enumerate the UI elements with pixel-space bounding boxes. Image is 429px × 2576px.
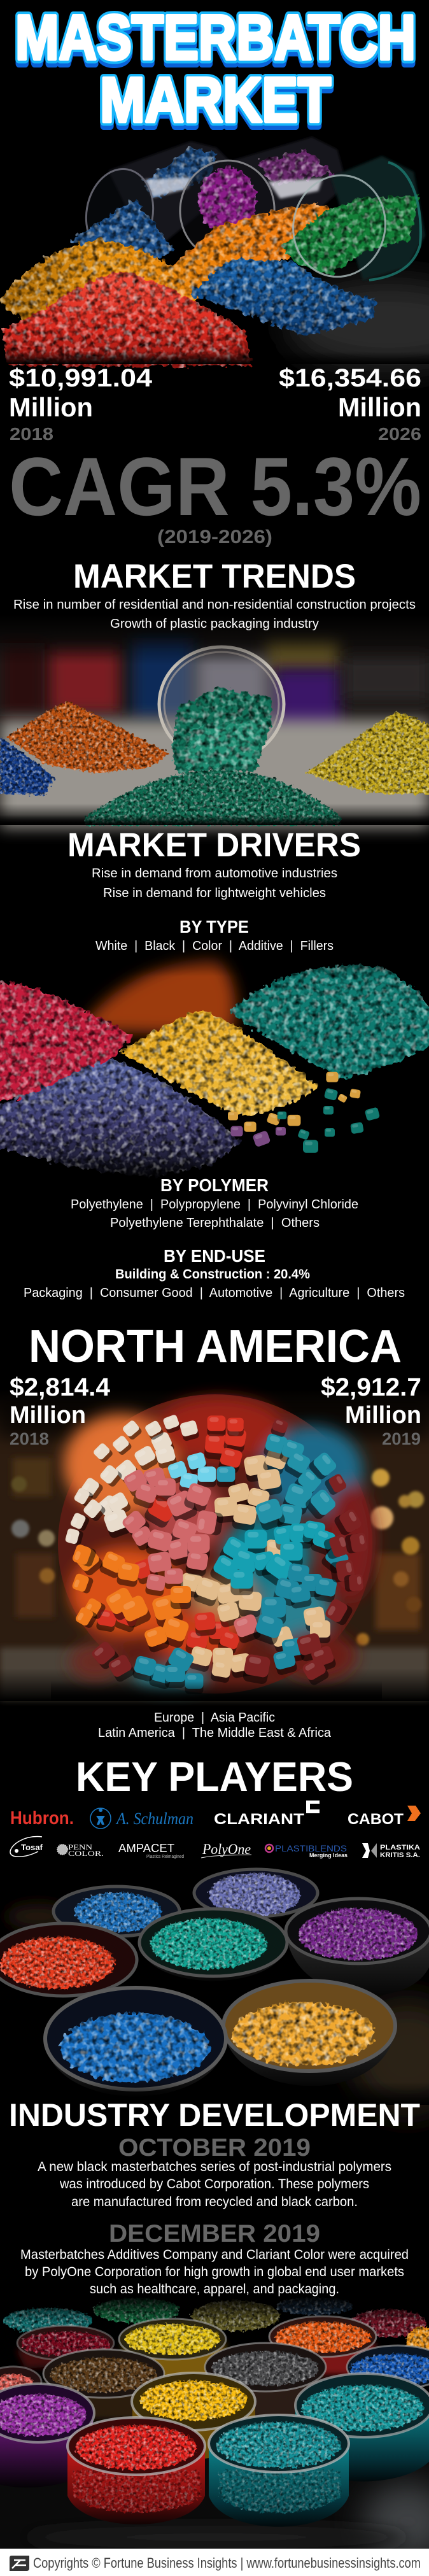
logo: Plastiblends: Merging Ideas: [309, 1852, 348, 1858]
logo: Plastiblends: PLASTIBLENDS: [275, 1843, 347, 1853]
logo: Penn Color: [57, 1843, 104, 1858]
image: sphere of colored pellets: [0, 1388, 429, 1701]
bokeh lights: [11, 1469, 424, 1646]
development: December 2019: [20, 2220, 409, 2296]
title: MARKET: [100, 64, 331, 135]
stat: 2026 market size: Million: [338, 392, 421, 422]
logo: Plastiblends: [265, 1843, 348, 1858]
bowl: periwinkle: [194, 1869, 318, 1920]
image: jars of spilled masterbatch pellets: [0, 137, 429, 369]
text: trends list: Growth of plastic packaging industry: [110, 617, 319, 631]
text: trends list: [13, 598, 416, 631]
panel: market size figures: [9, 364, 421, 548]
dish: teal front: [209, 2415, 349, 2527]
logo: Plastika Kritis: KRITIS S.A.: [380, 1851, 420, 1859]
logo: PolyOne: PolyOne: [202, 1841, 251, 1857]
panel: industry development: [0, 1869, 429, 2559]
logo: Fortune Business Insights: [10, 2556, 29, 2571]
footer bar: [0, 2549, 429, 2576]
segment: by polymer: [71, 1175, 358, 1230]
bowl: large blue: [45, 1988, 226, 2096]
stat: 2018 market size: 2018: [10, 424, 53, 444]
stat: north america 2019: 2019: [382, 1429, 421, 1448]
bowl: purple: [286, 1899, 429, 1995]
segment: by end-use: BY END-USE: [164, 1246, 265, 1266]
image: pellets spilling from jar: [0, 614, 429, 828]
logo: Ampacet: AMPACET: [118, 1842, 174, 1855]
stat: north america 2019: [321, 1373, 421, 1448]
back rows of dishes: [0, 2297, 429, 2438]
logo: Ampacet: [118, 1842, 184, 1859]
segment: by type: [95, 917, 334, 953]
logo: Tosaf: Tosaf: [21, 1843, 43, 1852]
heading: industry development: INDUSTRY DEVELOPMENT: [9, 2097, 420, 2133]
stat: north america 2018: Million: [10, 1402, 86, 1429]
development: October 2019: OCTOBER 2019: [118, 2134, 311, 2162]
text: drivers list: [92, 867, 337, 900]
logo: Clariant: [214, 1801, 320, 1828]
development: December 2019: by PolyOne Corporation for high growth in global end user markets: [25, 2265, 404, 2279]
segment: by end-use: Packaging | Consumer Good | Automotive | Agriculture | Others: [24, 1286, 405, 1300]
dish: purple: [0, 2384, 94, 2488]
stat: 2026 market size: [279, 364, 421, 444]
logo: Plastika Kritis: [362, 1843, 420, 1859]
text: trends list: Rise in number of residential and non-residential construction projects: [13, 598, 416, 612]
stat: north america 2019: Million: [345, 1402, 421, 1429]
development: October 2019: [38, 2134, 391, 2209]
title: [15, 2, 416, 139]
panel: regional analysis: [0, 1321, 429, 1740]
stat: 2018 market size: Million: [9, 392, 93, 422]
heading: key players: KEY PLAYERS: [76, 1753, 353, 1800]
stat: 2018 market size: [9, 364, 153, 444]
logo: Cabot: [348, 1806, 421, 1828]
development: December 2019: DECEMBER 2019: [109, 2220, 320, 2247]
panel: market trends: [0, 558, 429, 828]
segment: by polymer: BY POLYMER: [160, 1175, 269, 1195]
logo: Penn Color: COLOR.: [68, 1849, 104, 1858]
dish: yellow: [132, 2373, 255, 2459]
logo: Clariant: CLARIANT: [214, 1811, 304, 1828]
panel: key players: [10, 1753, 421, 1859]
logo: A. Schulman: [90, 1808, 193, 1829]
stat: north america 2019: $2,912.7: [321, 1373, 421, 1401]
logo: A. Schulman: A. Schulman: [115, 1809, 193, 1828]
title: MARKET: [100, 64, 331, 135]
development: October 2019: was introduced by Cabot Corporation. These polymers: [59, 2177, 369, 2191]
sphere color zones: [64, 1398, 376, 1690]
logo: Hubron: Hubron.: [10, 1808, 74, 1829]
dish: teal right: [295, 2374, 429, 2482]
text: other regions: Latin America | The Middle East & Africa: [98, 1726, 332, 1740]
text: drivers list: Rise in demand from automotive industries: [92, 867, 337, 881]
logo: Plastika Kritis: PLASTIKA: [380, 1844, 420, 1851]
logo: Cabot: CABOT: [348, 1811, 404, 1828]
scattered pellets: [228, 1072, 381, 1157]
text: other regions: [98, 1711, 332, 1740]
dish: red front: [67, 2417, 205, 2524]
panel: hero: [0, 2, 429, 369]
development: December 2019: such as healthcare, apparel, and packaging.: [90, 2282, 339, 2296]
title: MARKET: [100, 69, 331, 139]
development: December 2019: Masterbatches Additives Company and Clariant Color were acquired: [20, 2247, 409, 2262]
stat: north america 2018: [10, 1373, 111, 1448]
logo: Ampacet: Plastics Reimagined: [146, 1855, 184, 1859]
segment: by end-use: [24, 1246, 405, 1300]
text: other regions: Europe | Asia Pacific: [154, 1711, 275, 1725]
segment: by end-use: Building & Construction : 20.4%: [115, 1267, 310, 1282]
heading: market trends: MARKET TRENDS: [73, 558, 356, 595]
image: colored pellet piles: [0, 938, 429, 1186]
pellets on sphere: [65, 1414, 368, 1694]
segment: by polymer: Polyethylene | Polypropylene | Polyvinyl Chloride: [71, 1198, 358, 1212]
stat: north america 2018: $2,814.4: [10, 1373, 111, 1401]
panel: market drivers and segments: [0, 826, 429, 1300]
stat: north america 2018: 2018: [10, 1429, 49, 1448]
bowl: red: [0, 1923, 137, 1996]
image: bowls of pellets: [0, 1869, 429, 2114]
segment: by type: White | Black | Color | Additive | Fillers: [95, 939, 334, 953]
development: October 2019: A new black masterbatches series of post-industrial polymers: [38, 2160, 391, 2174]
stat: 2026 market size: $16,354.66: [279, 364, 421, 392]
image: glass dishes of pellets: [0, 2295, 429, 2559]
bowl: teal: [139, 1909, 287, 1981]
stat: 2018 market size: $10,991.04: [9, 364, 153, 392]
bowl: blue: [53, 1886, 179, 1939]
logo: Tosaf: [10, 1837, 43, 1857]
text: drivers list: Rise in demand for lightweight vehicles: [103, 886, 326, 900]
segment: by polymer: Polyethylene Terephthalate | Others: [110, 1216, 320, 1230]
segment: by type: BY TYPE: [179, 917, 249, 937]
logo: Penn Color: PENN: [68, 1843, 92, 1851]
heading: north america: NORTH AMERICA: [29, 1321, 402, 1372]
bowl: yellow: [223, 1981, 395, 2086]
stat: CAGR: (2019-2026): [157, 527, 272, 548]
stat: 2026 market size: 2026: [378, 424, 421, 444]
heading: market drivers: MARKET DRIVERS: [67, 826, 361, 864]
development: October 2019: are manufactured from recycled and black carbon.: [71, 2195, 358, 2209]
